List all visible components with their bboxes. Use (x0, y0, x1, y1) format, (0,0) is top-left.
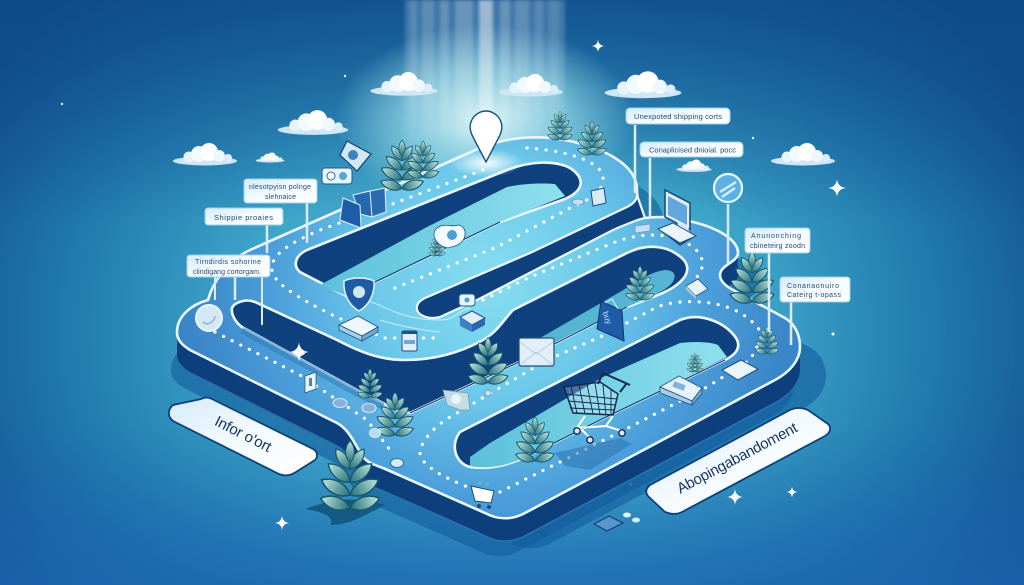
light beam from top (335, 0, 635, 215)
road surface (177, 137, 800, 518)
label: shipping process (205, 208, 283, 253)
panel: info sign: Infor o'ort (212, 413, 275, 456)
plants (357, 111, 779, 465)
label: top left (244, 179, 317, 243)
monitor and keyboard icon (635, 190, 696, 246)
box icons on road (339, 316, 378, 341)
shield icon (344, 278, 374, 311)
label: complicated checkout process (640, 142, 743, 218)
long curved gap (232, 247, 687, 413)
label: lower left: clindigang cortorgam. (193, 269, 261, 276)
small box icon (686, 279, 708, 299)
location pin (448, 111, 524, 177)
notepad icon (402, 331, 417, 351)
label: complicated checkout process: Conaplicised dnioial. pocc (649, 146, 736, 154)
dotted route lines (215, 148, 761, 492)
speech icon on road (443, 390, 491, 410)
sparkle on road (289, 342, 309, 362)
label: continuing: Conanaonuiro (787, 283, 839, 290)
middle gap in road (417, 195, 645, 318)
large plant with shadow (305, 441, 385, 525)
label: shipping process: Shippie proaies (214, 213, 273, 222)
lower gap in road (455, 317, 738, 468)
thin swirl lines on road (365, 300, 470, 332)
label: announcing (745, 228, 810, 332)
lamp badge (714, 174, 742, 265)
label: continuing: Cateirg t-opass (787, 292, 842, 299)
platform ground shadow (171, 175, 794, 556)
panel: info sign (169, 398, 317, 475)
heart bubble icon (434, 225, 465, 248)
coins on road (333, 398, 404, 468)
label: lower left (187, 255, 270, 325)
face badge icon (196, 305, 222, 331)
right shadow of platform (203, 167, 826, 548)
gift box icon (459, 294, 485, 332)
speech bubble icons (322, 141, 371, 184)
label: announcing: Anunonching (751, 233, 801, 240)
label: unexpected shipping costs: Unexpoted shipping corts (634, 112, 722, 121)
blue shopping bag icon: buy (601, 310, 614, 325)
shopping bags icon (340, 188, 386, 228)
envelope icon (519, 338, 554, 366)
panel: shopping abandonment sign (646, 408, 830, 514)
label: unexpected shipping costs (626, 108, 730, 193)
panel: shopping abandonment sign: Abopingabandoment (674, 419, 801, 497)
upper gap in road (296, 163, 581, 299)
stars and sparkles (61, 40, 846, 530)
road wall (177, 144, 800, 542)
label: top left: slehnaice (265, 194, 296, 201)
small building icon (305, 372, 316, 393)
top road note icon (572, 188, 606, 206)
shopping cart (555, 373, 632, 470)
flat card icon (722, 360, 758, 380)
phone and pebbles (594, 512, 640, 531)
stack of cards icon (660, 376, 702, 405)
winding road platform (177, 137, 800, 542)
label: lower left: Tirndirdis sohorine (195, 259, 261, 266)
blue shopping bag icon (597, 299, 624, 341)
mini cart icon (471, 481, 494, 509)
label: continuing (780, 277, 850, 345)
label: top left: nlesotpyisn polnge (249, 184, 311, 191)
clouds (173, 71, 835, 172)
label: announcing: cbineteirg zoodn (750, 243, 805, 250)
